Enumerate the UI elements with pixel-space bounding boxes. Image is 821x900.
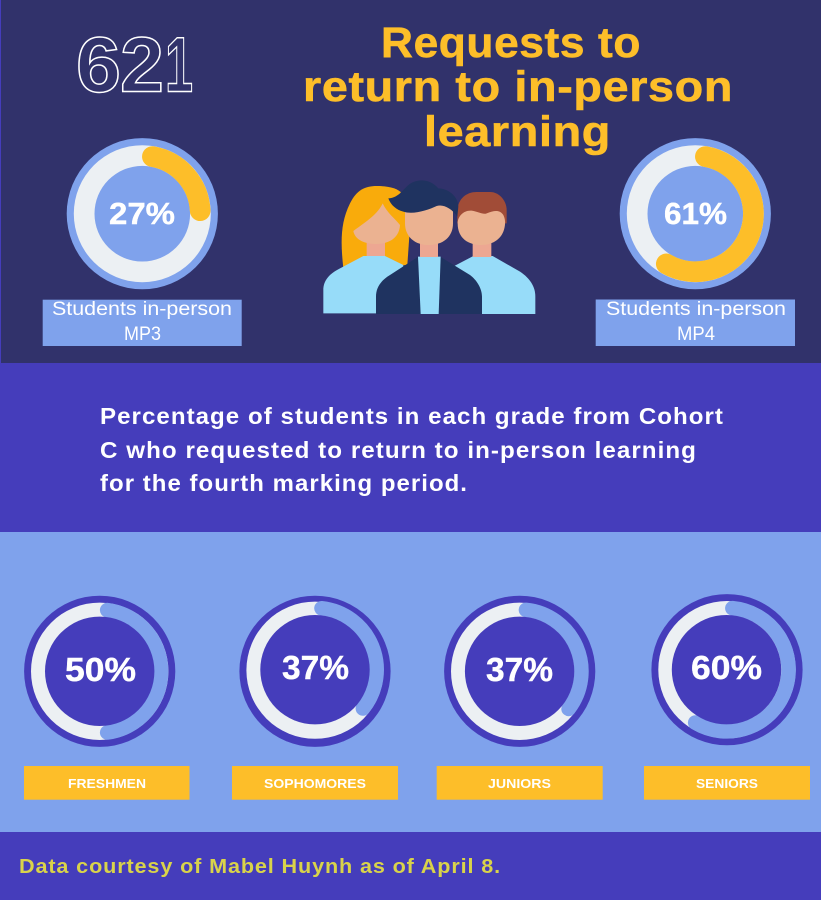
label: juniors: [437, 766, 603, 800]
donut chart: freshmen 50%: 50%: [65, 651, 136, 688]
big number: 621 requests: 1: [165, 20, 193, 108]
donut chart: 61% students in-person MP4: [620, 138, 771, 289]
donut chart: 27% students in-person MP3: [67, 138, 218, 289]
icon: three students: [323, 180, 535, 314]
label: students in-person MP4: [596, 299, 795, 346]
donut chart: juniors 37%: 37%: [486, 651, 553, 688]
panel: description background: [0, 363, 821, 532]
donut chart: juniors 37%: [444, 596, 595, 747]
panel: header background: [0, 0, 821, 363]
label: students in-person MP4: MP4: [677, 324, 715, 345]
big number: 621 requests: 6: [76, 20, 121, 108]
donut chart: sophomores 37%: 37%: [282, 649, 349, 686]
label: juniors: JUNIORS: [488, 776, 551, 791]
label: students in-person MP4: Students in-person: [606, 299, 786, 320]
label: sophomores: [232, 766, 398, 800]
donut chart: seniors 60%: [651, 594, 803, 745]
text block: description: C who requested to return to in-person learning: [100, 437, 697, 463]
big number: 621 requests: [76, 20, 193, 108]
donut chart: 61% students in-person MP4: 61%: [664, 196, 727, 231]
title: learning: [424, 108, 611, 156]
text block: description: [100, 403, 724, 496]
label: students in-person MP3: MP3: [124, 324, 161, 345]
footer: data credit: Data courtesy of Mabel Huynh as of April 8.: [19, 856, 501, 878]
label: seniors: [644, 766, 810, 800]
text block: description: Percentage of students in each grade from Cohort: [100, 403, 724, 429]
label: students in-person MP3: [43, 299, 242, 346]
title: return to in-person: [303, 63, 733, 111]
label: students in-person MP3: Students in-person: [52, 299, 232, 320]
title: [303, 19, 733, 156]
donut chart: 27% students in-person MP3: 27%: [109, 196, 175, 231]
label: freshmen: [24, 766, 190, 800]
text block: description: for the fourth marking period.: [100, 470, 468, 496]
donut chart: freshmen 50%: [24, 596, 175, 747]
donut chart: seniors 60%: 60%: [691, 649, 762, 686]
donut chart: sophomores 37%: [239, 596, 391, 747]
title: Requests to: [381, 19, 641, 67]
panel: grade breakdown background: [0, 532, 821, 832]
label: freshmen: FRESHMEN: [68, 776, 146, 791]
label: seniors: SENIORS: [696, 776, 758, 791]
label: sophomores: SOPHOMORES: [264, 776, 366, 791]
panel: footer background: [0, 832, 821, 900]
big number: 621 requests: 2: [120, 20, 164, 108]
